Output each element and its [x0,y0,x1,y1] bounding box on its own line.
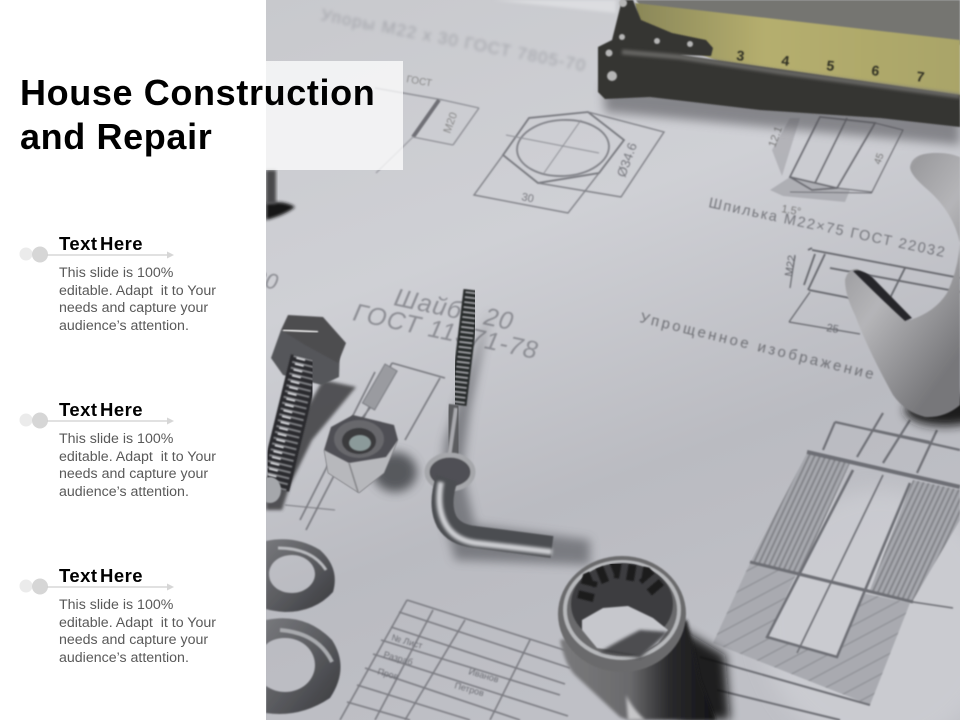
drawing: top blurred part [375,74,479,173]
drawing: title block table: Иванов [467,666,500,685]
bolt thread [274,358,306,488]
tape measure [598,0,960,145]
title [20,72,375,157]
body text: needs and capture your [59,300,208,316]
thread stripes [458,292,472,405]
ring socket [571,563,673,645]
drawing: title block table: Пров [376,666,400,682]
yellow blade [635,3,960,97]
rivets [606,0,693,81]
drawing: stud M22: 45 [872,151,887,166]
dark tape housing [598,0,960,127]
heading: Text Here [59,565,143,586]
drawing: stud M22: Шпилька М22×75 ГОСТ 22032 [707,195,948,261]
bolt shadow [266,380,356,510]
hex nut [324,415,417,493]
nut shadow [373,452,417,492]
heading: Text Here [59,399,143,420]
body text: This slide is 100% [59,431,173,447]
housing highlight [622,52,960,96]
annotation: top blurred caption: Упоры М22 х 30 ГОСТ 7805-70 [319,5,588,75]
washer 2 [266,618,341,714]
washer 1 [266,539,335,612]
wrench shadow [905,394,960,426]
ring spanner [558,556,730,720]
body text [59,597,216,666]
tape background surface [636,0,960,45]
socket teeth [585,570,662,600]
thread shank [458,290,472,405]
annotation: simplified view caption: Упрощенное изображение [638,309,878,384]
annotation: washer caption [250,264,541,365]
nut hole [334,420,384,458]
bolt shaft [274,358,306,488]
body text: This slide is 100% [59,597,173,613]
drawing: top blurred part: M20 [442,111,460,135]
drawing: small stud side view [783,248,960,336]
blade numbers: 7 [916,68,926,85]
annotation: washer caption: Шайба 20 [392,283,516,336]
screw hook [427,290,590,565]
hex bolt [259,315,356,510]
drawing: title block table: Разраб [382,649,414,667]
body text: This slide is 100% [59,265,173,281]
body text: needs and capture your [59,632,208,648]
body text [59,431,216,500]
body text: audience’s attention. [59,484,189,500]
opening shadow [600,630,668,658]
body text: editable. Adapt it to Your [59,614,216,630]
body text: editable. Adapt it to Your [59,282,216,298]
drawing: hexagon bolt head: Ø34.6 [614,141,640,179]
icon: dots and arrow line [20,578,174,594]
tape shadow [603,85,960,145]
drawing: hexagon bolt head [474,112,664,213]
title: and Repair [20,116,212,157]
drawing: small stud side view: M22 [783,254,799,278]
list item 1 [20,233,216,334]
drawing: small stud side view: 25 [825,322,840,336]
photo: blueprint with tools and fasteners [266,0,960,720]
translucent white title backing [266,61,403,170]
wrench jaw inner shadow [853,270,912,321]
black blurred part at panel edge [266,170,295,220]
nut body [324,415,398,493]
open-end wrench [845,153,960,426]
spanner handle [560,620,716,720]
ring opening [582,606,668,655]
list item 3 [20,565,216,666]
annotation: washer caption: ГОСТ 11371-78 [351,298,541,365]
body text: needs and capture your [59,466,208,482]
handle highlight [626,695,645,720]
drawing: lines beside the bolt [285,363,445,530]
bolt thread highlight [269,358,301,488]
title: House Construction [20,72,375,113]
smooth shank [450,405,457,460]
drawing: title block table: Петров [453,680,485,698]
body text: editable. Adapt it to Your [59,448,216,464]
nut side faces [324,440,398,493]
drawing: stud M22: 12.1 [767,125,785,149]
blade numbers [736,47,926,85]
drawing: anchored stud section [700,413,960,720]
L-shaped hook [442,478,552,547]
drawing: stud M22: 1.5° [780,203,802,218]
drawing: stud M22 [707,117,948,261]
bolt head [281,315,346,363]
screw shadow [440,310,590,565]
icon: dots and arrow line [20,246,174,262]
ring rim highlight [565,562,679,658]
spanner shadow [675,625,730,720]
drawing: top blurred part: ГОСТ [405,74,433,89]
body text: audience’s attention. [59,650,189,666]
drawing: title block table: № Лист [390,632,424,651]
blade numbers: 6 [871,62,881,79]
blade numbers: 5 [826,57,836,74]
drawing: title block table [340,600,580,720]
list item 2 [20,399,216,500]
heading: Text Here [59,233,143,254]
icon: dots and arrow line [20,412,174,428]
bolt end [259,477,281,503]
flat washers [266,539,341,714]
drawing: hexagon bolt head: 30 [520,191,535,205]
body text [59,265,216,334]
wrench body [845,153,960,417]
body text: audience’s attention. [59,318,189,334]
blade numbers: 3 [736,47,746,64]
blade numbers: 4 [781,52,791,69]
eye ring [427,455,473,489]
paper background [266,0,960,720]
spanner ring [558,556,686,672]
bolt washer face [271,330,340,385]
